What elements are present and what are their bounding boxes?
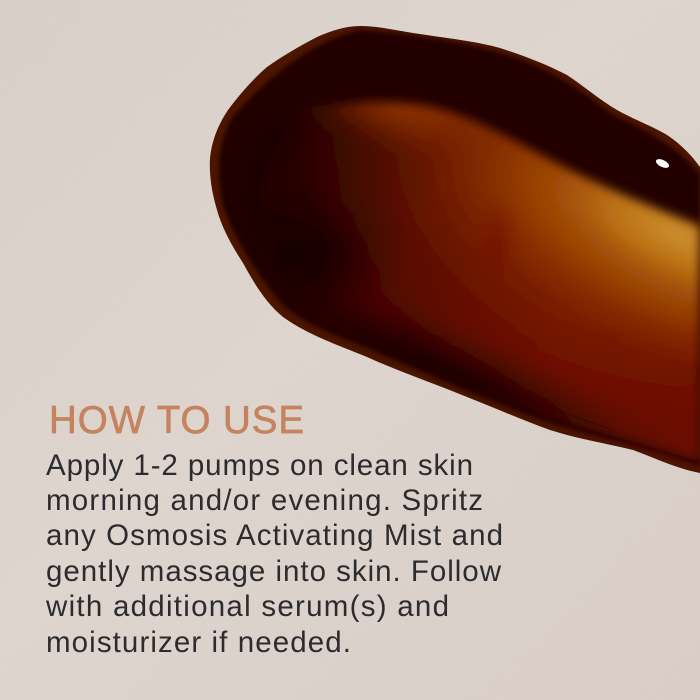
dark serum body xyxy=(219,30,700,466)
instructions text: with additional serum(s) and xyxy=(45,590,449,623)
highlight on swatch xyxy=(655,157,670,170)
heading: HOW TO USE xyxy=(49,399,304,442)
instructions text xyxy=(45,449,503,659)
serum swatch xyxy=(210,26,700,473)
instructions text: morning and/or evening. Spritz xyxy=(46,484,483,517)
edge crease xyxy=(323,307,613,430)
instructions text: any Osmosis Activating Mist and xyxy=(46,519,503,552)
instructions text: moisturizer if needed. xyxy=(46,626,351,659)
instructions text: Apply 1-2 pumps on clean skin xyxy=(46,449,473,482)
lit interior xyxy=(278,96,700,464)
instructions text: gently massage into skin. Follow xyxy=(46,555,502,588)
